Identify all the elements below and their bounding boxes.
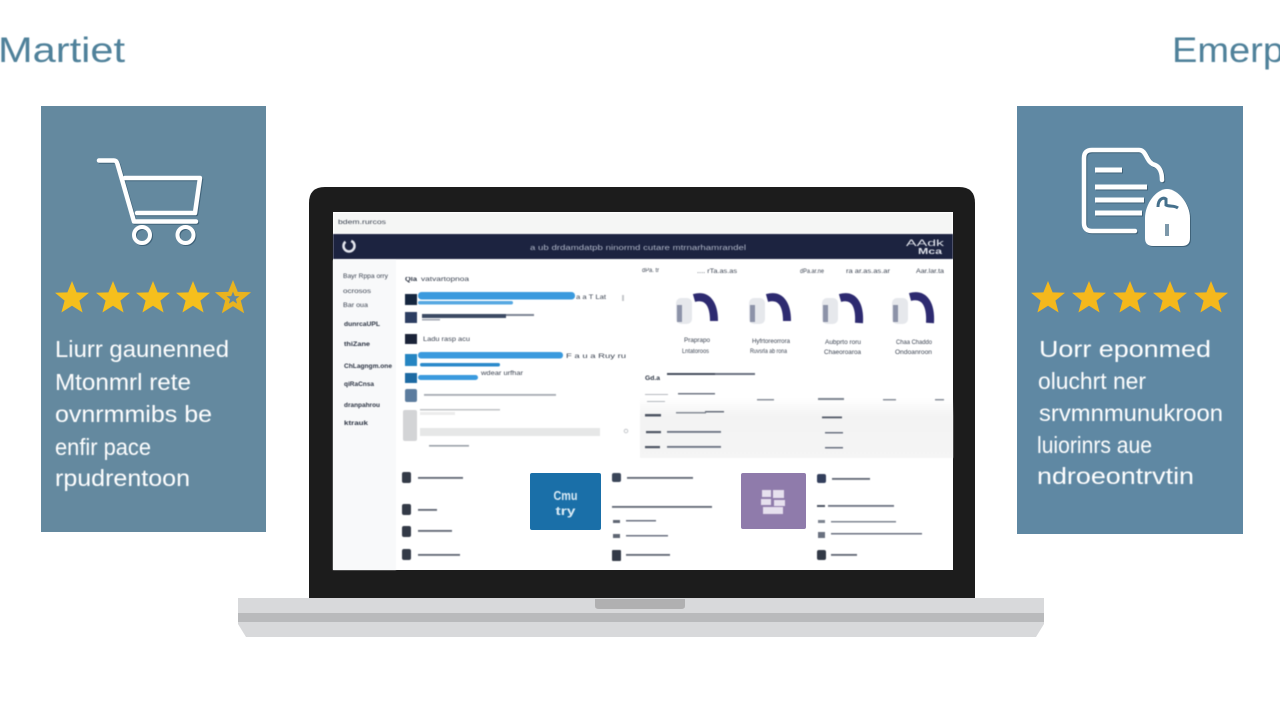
sidebar menu: ktrauk: [344, 421, 369, 427]
text block: left description: rpudrentoon: [55, 465, 190, 491]
blue card: [530, 473, 601, 530]
purple card: [741, 473, 806, 529]
icon: shopping cart: [99, 160, 200, 243]
gauge 2: Hyfrtoreorrora: [752, 339, 791, 345]
navigation bar: AAdk: [906, 238, 945, 248]
laptop: [238, 187, 1044, 637]
gauge 3: [822, 297, 862, 356]
sidebar menu: dunrcaUPL: [344, 322, 380, 328]
laptop base: [238, 598, 1044, 637]
screen: [333, 212, 953, 570]
gauge row: .... rTa.as.as: [697, 269, 737, 275]
navigation bar: [333, 234, 953, 259]
gauge row: ra ar.as.as.ar: [846, 269, 890, 275]
text block: right description: Uorr eponmed: [1039, 336, 1211, 362]
laptop bezel: [309, 187, 975, 598]
rating: right stars: [1031, 281, 1228, 312]
gauge row: Aar.lar.ta: [916, 269, 945, 275]
purple card detail list: [817, 474, 922, 560]
list with progress bars: wdear urfhar: [480, 371, 523, 377]
text block: right description: [1037, 336, 1223, 489]
text block: left description: ovnrmmibs be: [55, 401, 212, 427]
title: right heading: Emerp: [1172, 31, 1280, 70]
list with progress bars: vatvartopnoa: [421, 277, 470, 283]
text block: right description: oluchrt ner: [1038, 368, 1146, 394]
data table: [640, 373, 953, 458]
gauge row: dPa. tr: [642, 268, 659, 274]
sidebar menu: thiZane: [344, 342, 371, 348]
gauge 3: Chaeoroaroa: [824, 350, 862, 356]
list with progress bars: [403, 277, 628, 447]
gauge 1: Lntatoroos: [682, 349, 709, 355]
gauge 3: Aubprto roru: [825, 340, 861, 346]
address bar: [334, 213, 952, 233]
address bar: bdem.rurcos: [338, 220, 386, 226]
list with progress bars: Ladu rasp acu: [423, 337, 470, 343]
text block: right description: ndroeontrvtin: [1037, 463, 1194, 489]
panel: right enterprise card: [1017, 106, 1243, 534]
blue card detail list: [612, 473, 712, 561]
gauge 4: [892, 296, 933, 356]
sidebar menu: ChLagngm.one: [344, 364, 393, 370]
icon: document with lock: [1084, 150, 1190, 246]
title: left heading: Martiet: [0, 31, 125, 70]
data table: Gd.a: [645, 376, 661, 382]
sidebar menu: Bar oua: [343, 303, 369, 309]
sidebar menu: Bayr Rppa orry: [343, 274, 388, 280]
blue card: try: [556, 504, 576, 518]
text block: left description: Liurr gaunenned: [55, 336, 229, 362]
text block: right description: srvmnmunukroon: [1039, 400, 1223, 426]
gauge 1: [676, 297, 714, 355]
gauge row: [642, 268, 945, 356]
gauge row: dPa.ar.ne: [800, 269, 825, 275]
navigation bar: Mca: [918, 247, 943, 256]
gauge 4: Ondoanroon: [895, 350, 932, 356]
text block: left description: Mtonmrl rete: [55, 369, 191, 395]
text block: left description: enfir pace: [55, 434, 151, 460]
gauge 4: Chaa Chaddo: [896, 340, 933, 346]
list with progress bars: F a u a Ruy ru: [566, 354, 626, 360]
sidebar menu: qiRaCnsa: [344, 382, 375, 388]
blue card: Cmu: [554, 488, 578, 503]
gauge 2: Ruvsrla ab rona: [750, 349, 788, 355]
list with progress bars: a a T Lat: [576, 295, 606, 301]
rating: left stars: [55, 281, 245, 312]
sidebar menu: ocrosos: [343, 289, 371, 295]
gauge 1: Praprapo: [684, 338, 711, 344]
gauge 2: [749, 297, 791, 355]
sidebar menu: dranpahrou: [344, 403, 380, 409]
panel: left market card: [41, 106, 266, 532]
text block: left description: [55, 336, 229, 491]
navigation bar: a ub drdamdatpb ninormd cutare mtrnarhamrandel: [530, 245, 747, 252]
list with progress bars: Qla: [405, 277, 418, 283]
text block: right description: luiorinrs aue: [1037, 432, 1152, 458]
bottom left list: [402, 472, 463, 560]
sidebar menu: [333, 260, 396, 570]
